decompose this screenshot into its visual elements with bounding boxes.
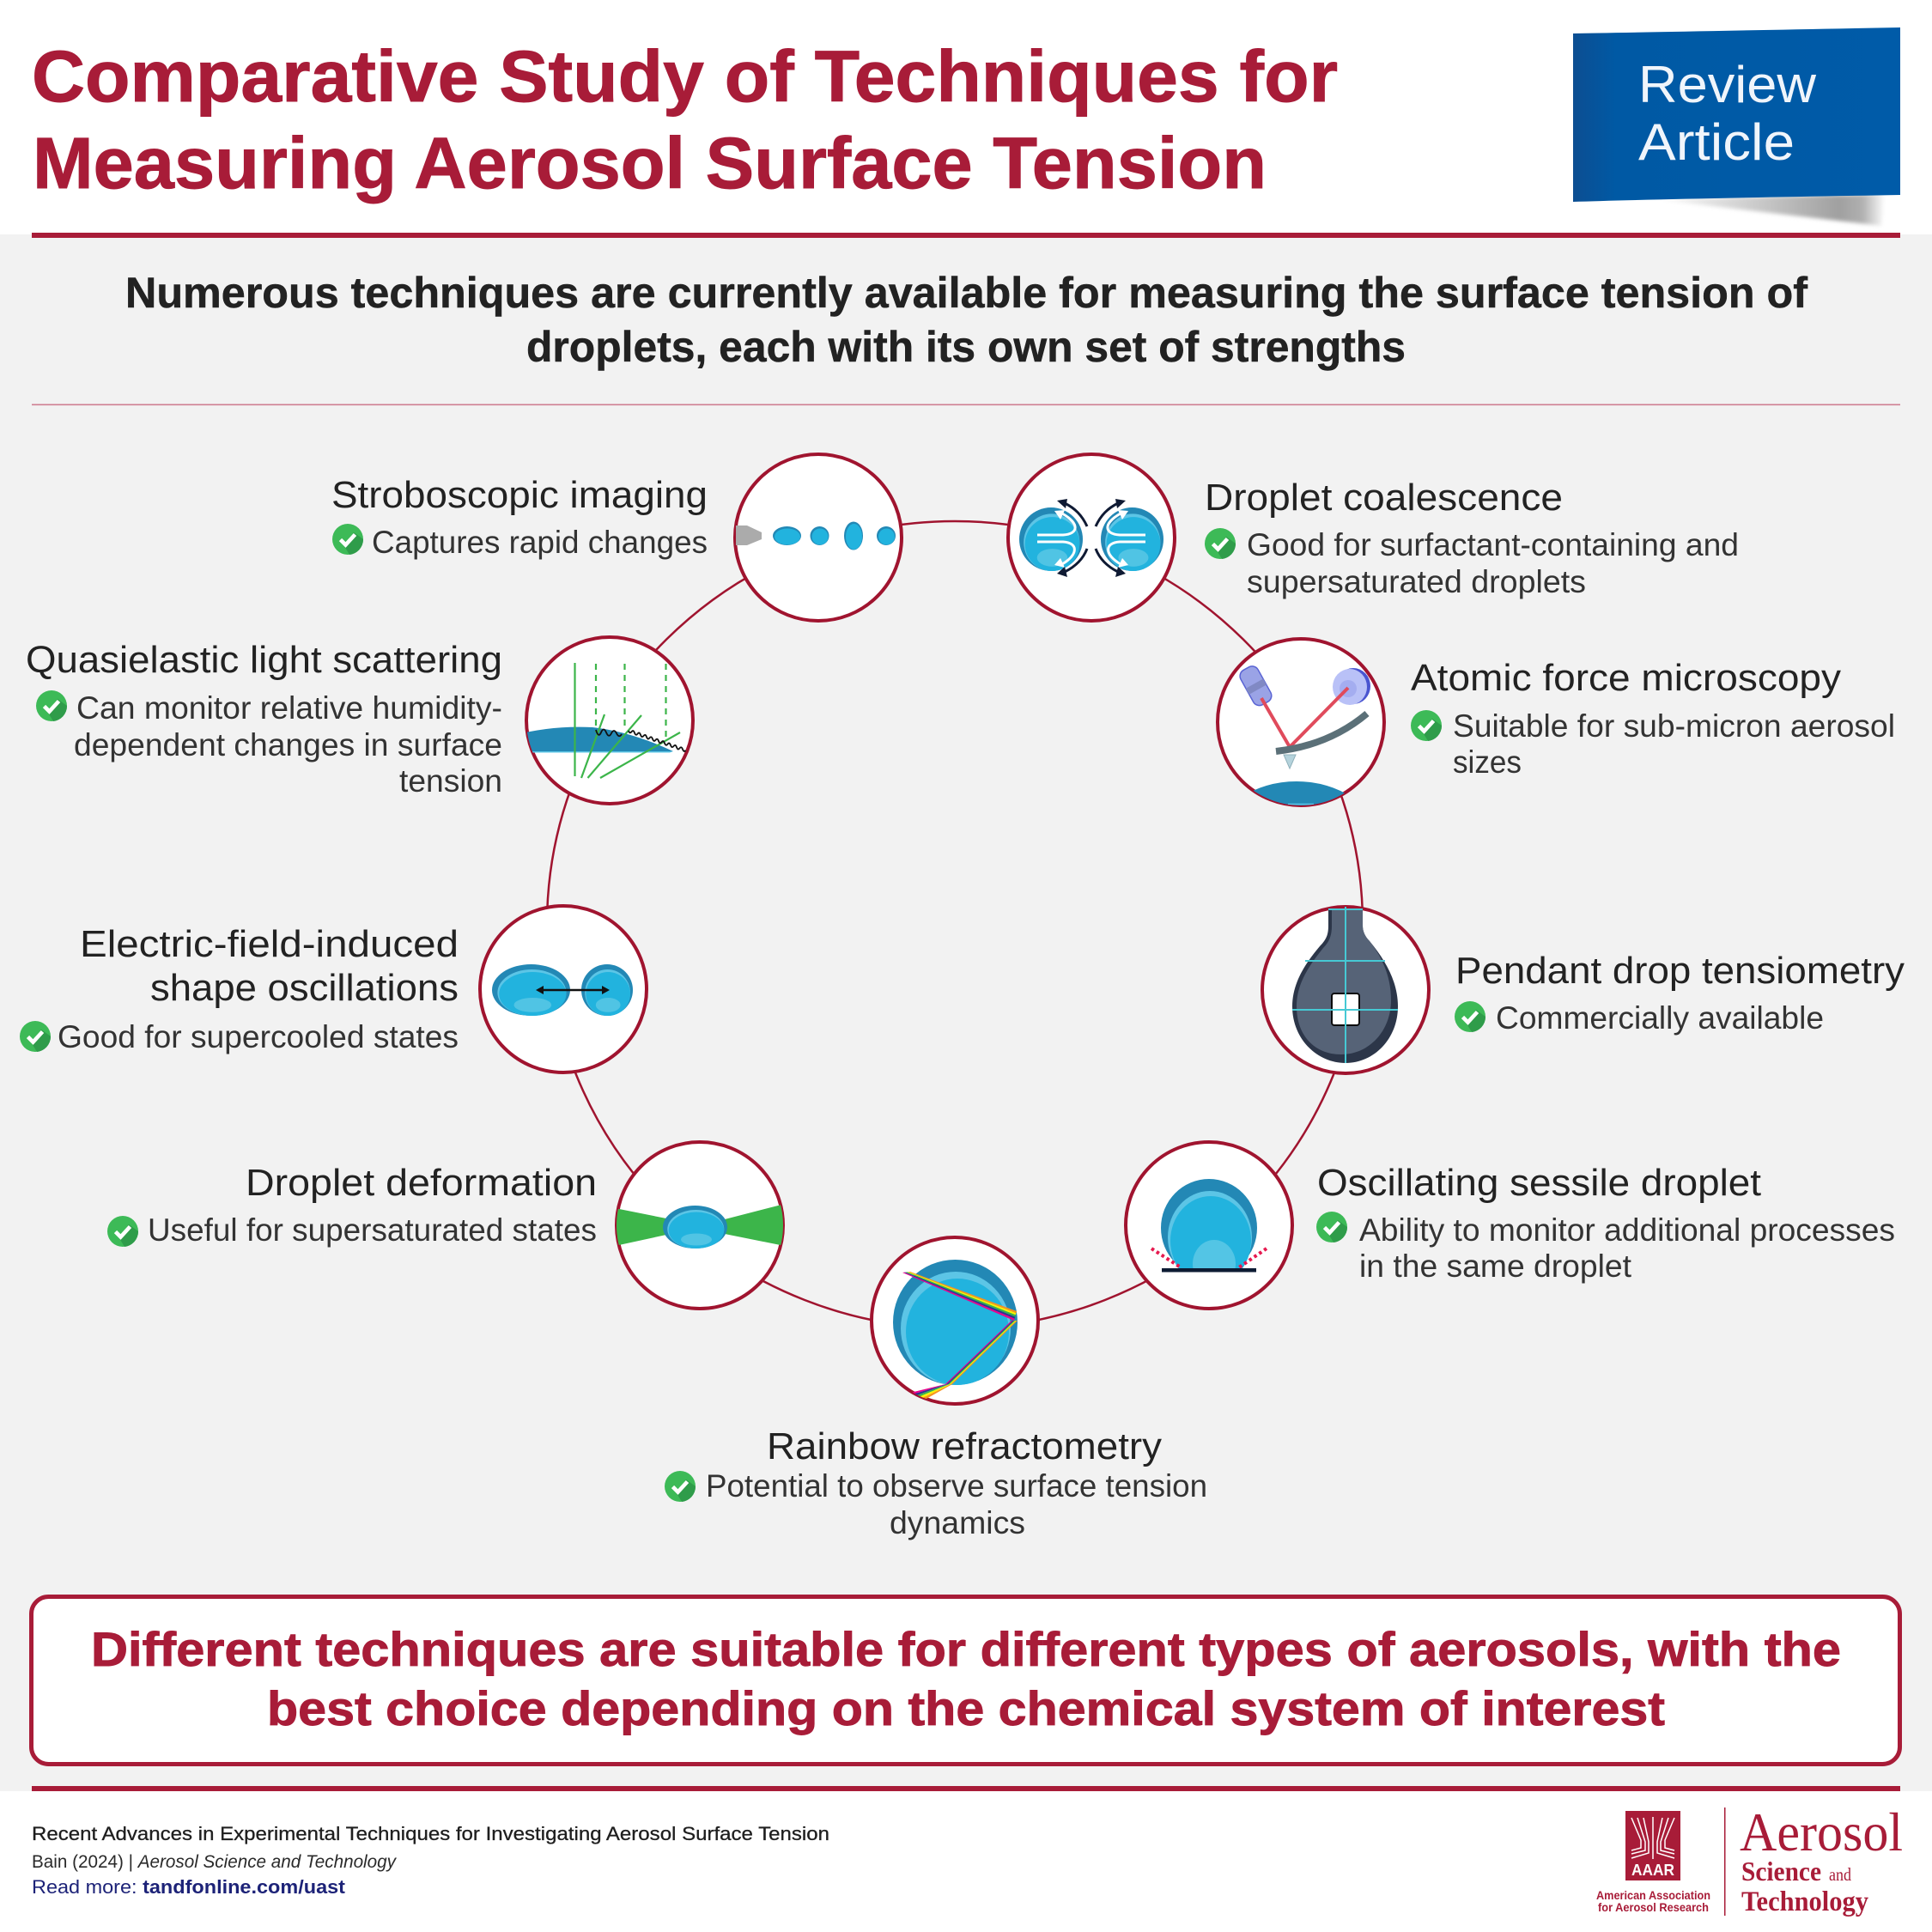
text: electric-field-induced shape oscillations: Good for supercooled states: [58, 1019, 459, 1054]
banner: review article: Article: [1638, 113, 1795, 171]
text: quasielastic light scattering: [26, 639, 502, 799]
intro statement: droplets, each with its own set of strengths: [526, 323, 1406, 371]
text: pendant drop tensiometry: Pendant drop tensiometry: [1455, 950, 1905, 992]
callout: conclusion: Different techniques are suitable for different types of aerosols, with the: [91, 1622, 1841, 1676]
icon: droplet deformation: [615, 1142, 785, 1309]
icon: stroboscopic imaging: [735, 454, 902, 621]
text: atomic force microscopy: [1411, 657, 1895, 780]
text: droplet coalescence: [1205, 477, 1739, 599]
title: Measuring Aerosol Surface Tension: [33, 123, 1267, 204]
icon: oscillating sessile droplet: [1126, 1142, 1292, 1309]
icon: droplet coalescence: [1008, 454, 1175, 621]
text: oscillating sessile droplet: Ability to monitor additional processes: [1359, 1212, 1895, 1248]
text: rainbow refractometry: Rainbow refractometry: [767, 1425, 1162, 1467]
logo: AAAR: AAAR: [1631, 1862, 1674, 1879]
text: oscillating sessile droplet: [1316, 1162, 1895, 1284]
text: rainbow refractometry: Potential to observe surface tension: [706, 1468, 1207, 1504]
text: stroboscopic imaging: [331, 474, 708, 560]
logo: Aerosol Science and Technology: and: [1829, 1864, 1851, 1885]
text: electric-field-induced shape oscillations: Electric-field-induced: [80, 923, 459, 965]
text: oscillating sessile droplet: in the same droplet: [1359, 1249, 1632, 1284]
text: pendant drop tensiometry: Commercially available: [1496, 1000, 1824, 1036]
logo: Aerosol Science and Technology: Science: [1741, 1856, 1821, 1886]
text: quasielastic light scattering: dependent changes in surface: [74, 727, 502, 762]
text: stroboscopic imaging: Captures rapid changes: [372, 525, 708, 560]
footer citation: Read more: tandfonline.com/uast: [32, 1876, 346, 1898]
banner: review article: [1573, 27, 1900, 226]
logo: AAAR: American Association: [1596, 1888, 1710, 1902]
banner: review article: Review: [1638, 56, 1817, 113]
footer citation: Bain (2024) | Aerosol Science and Technology: [32, 1852, 397, 1872]
text: atomic force microscopy: Suitable for sub-micron aerosol: [1453, 708, 1895, 744]
text: droplet deformation: [107, 1162, 597, 1248]
footer citation: [32, 1823, 829, 1898]
text: rainbow refractometry: [665, 1425, 1207, 1540]
logo: Aerosol Science and Technology: Technology: [1741, 1886, 1868, 1917]
icon: quasielastic light scattering: [526, 637, 693, 804]
footer citation: Recent Advances in Experimental Techniques for Investigating Aerosol Surface Tension: [32, 1823, 829, 1844]
text: oscillating sessile droplet: Oscillating sessile droplet: [1317, 1162, 1761, 1204]
text: atomic force microscopy: sizes: [1453, 744, 1522, 780]
logo: AAAR: for Aerosol Research: [1598, 1900, 1709, 1914]
text: rainbow refractometry: dynamics: [890, 1505, 1025, 1540]
logo: Aerosol Science and Technology: Aerosol: [1740, 1801, 1903, 1862]
intro statement: Numerous techniques are currently available for measuring the surface tension of: [125, 269, 1807, 317]
text: stroboscopic imaging: Stroboscopic imaging: [331, 474, 708, 516]
logo: Aerosol Science and Technology: [1740, 1801, 1903, 1917]
text: droplet deformation: Useful for supersaturated states: [148, 1212, 597, 1248]
text: droplet coalescence: supersaturated droplets: [1247, 564, 1586, 599]
logo: AAAR: [1596, 1811, 1710, 1914]
title: [32, 36, 1338, 204]
text: quasielastic light scattering: tension: [399, 763, 502, 799]
callout: conclusion: best choice depending on the chemical system of interest: [267, 1681, 1665, 1735]
text: quasielastic light scattering: Quasielastic light scattering: [26, 639, 502, 681]
text: atomic force microscopy: Atomic force microscopy: [1411, 657, 1841, 699]
title: Comparative Study of Techniques for: [32, 36, 1338, 117]
bottom rule: [32, 1786, 1900, 1791]
icon: pendant drop: [1262, 907, 1429, 1073]
text: electric-field-induced shape oscillations: [20, 923, 459, 1054]
text: droplet coalescence: Good for surfactant-containing and: [1247, 527, 1739, 562]
text: electric-field-induced shape oscillations: shape oscillations: [150, 967, 459, 1009]
top rule: [32, 233, 1900, 238]
text: pendant drop tensiometry: [1455, 950, 1905, 1036]
callout: conclusion: [31, 1597, 1899, 1764]
intro statement: [125, 269, 1807, 371]
icon: atomic force microscopy: [1216, 637, 1386, 807]
icon: rainbow refractometry: [872, 1237, 1038, 1404]
icon: electric-field-induced oscillations: [480, 906, 647, 1072]
text: droplet deformation: Droplet deformation: [246, 1162, 597, 1204]
text: droplet coalescence: Droplet coalescence: [1205, 477, 1563, 519]
connecting ring: [547, 521, 1363, 1328]
text: quasielastic light scattering: Can monitor relative humidity-: [76, 690, 502, 726]
